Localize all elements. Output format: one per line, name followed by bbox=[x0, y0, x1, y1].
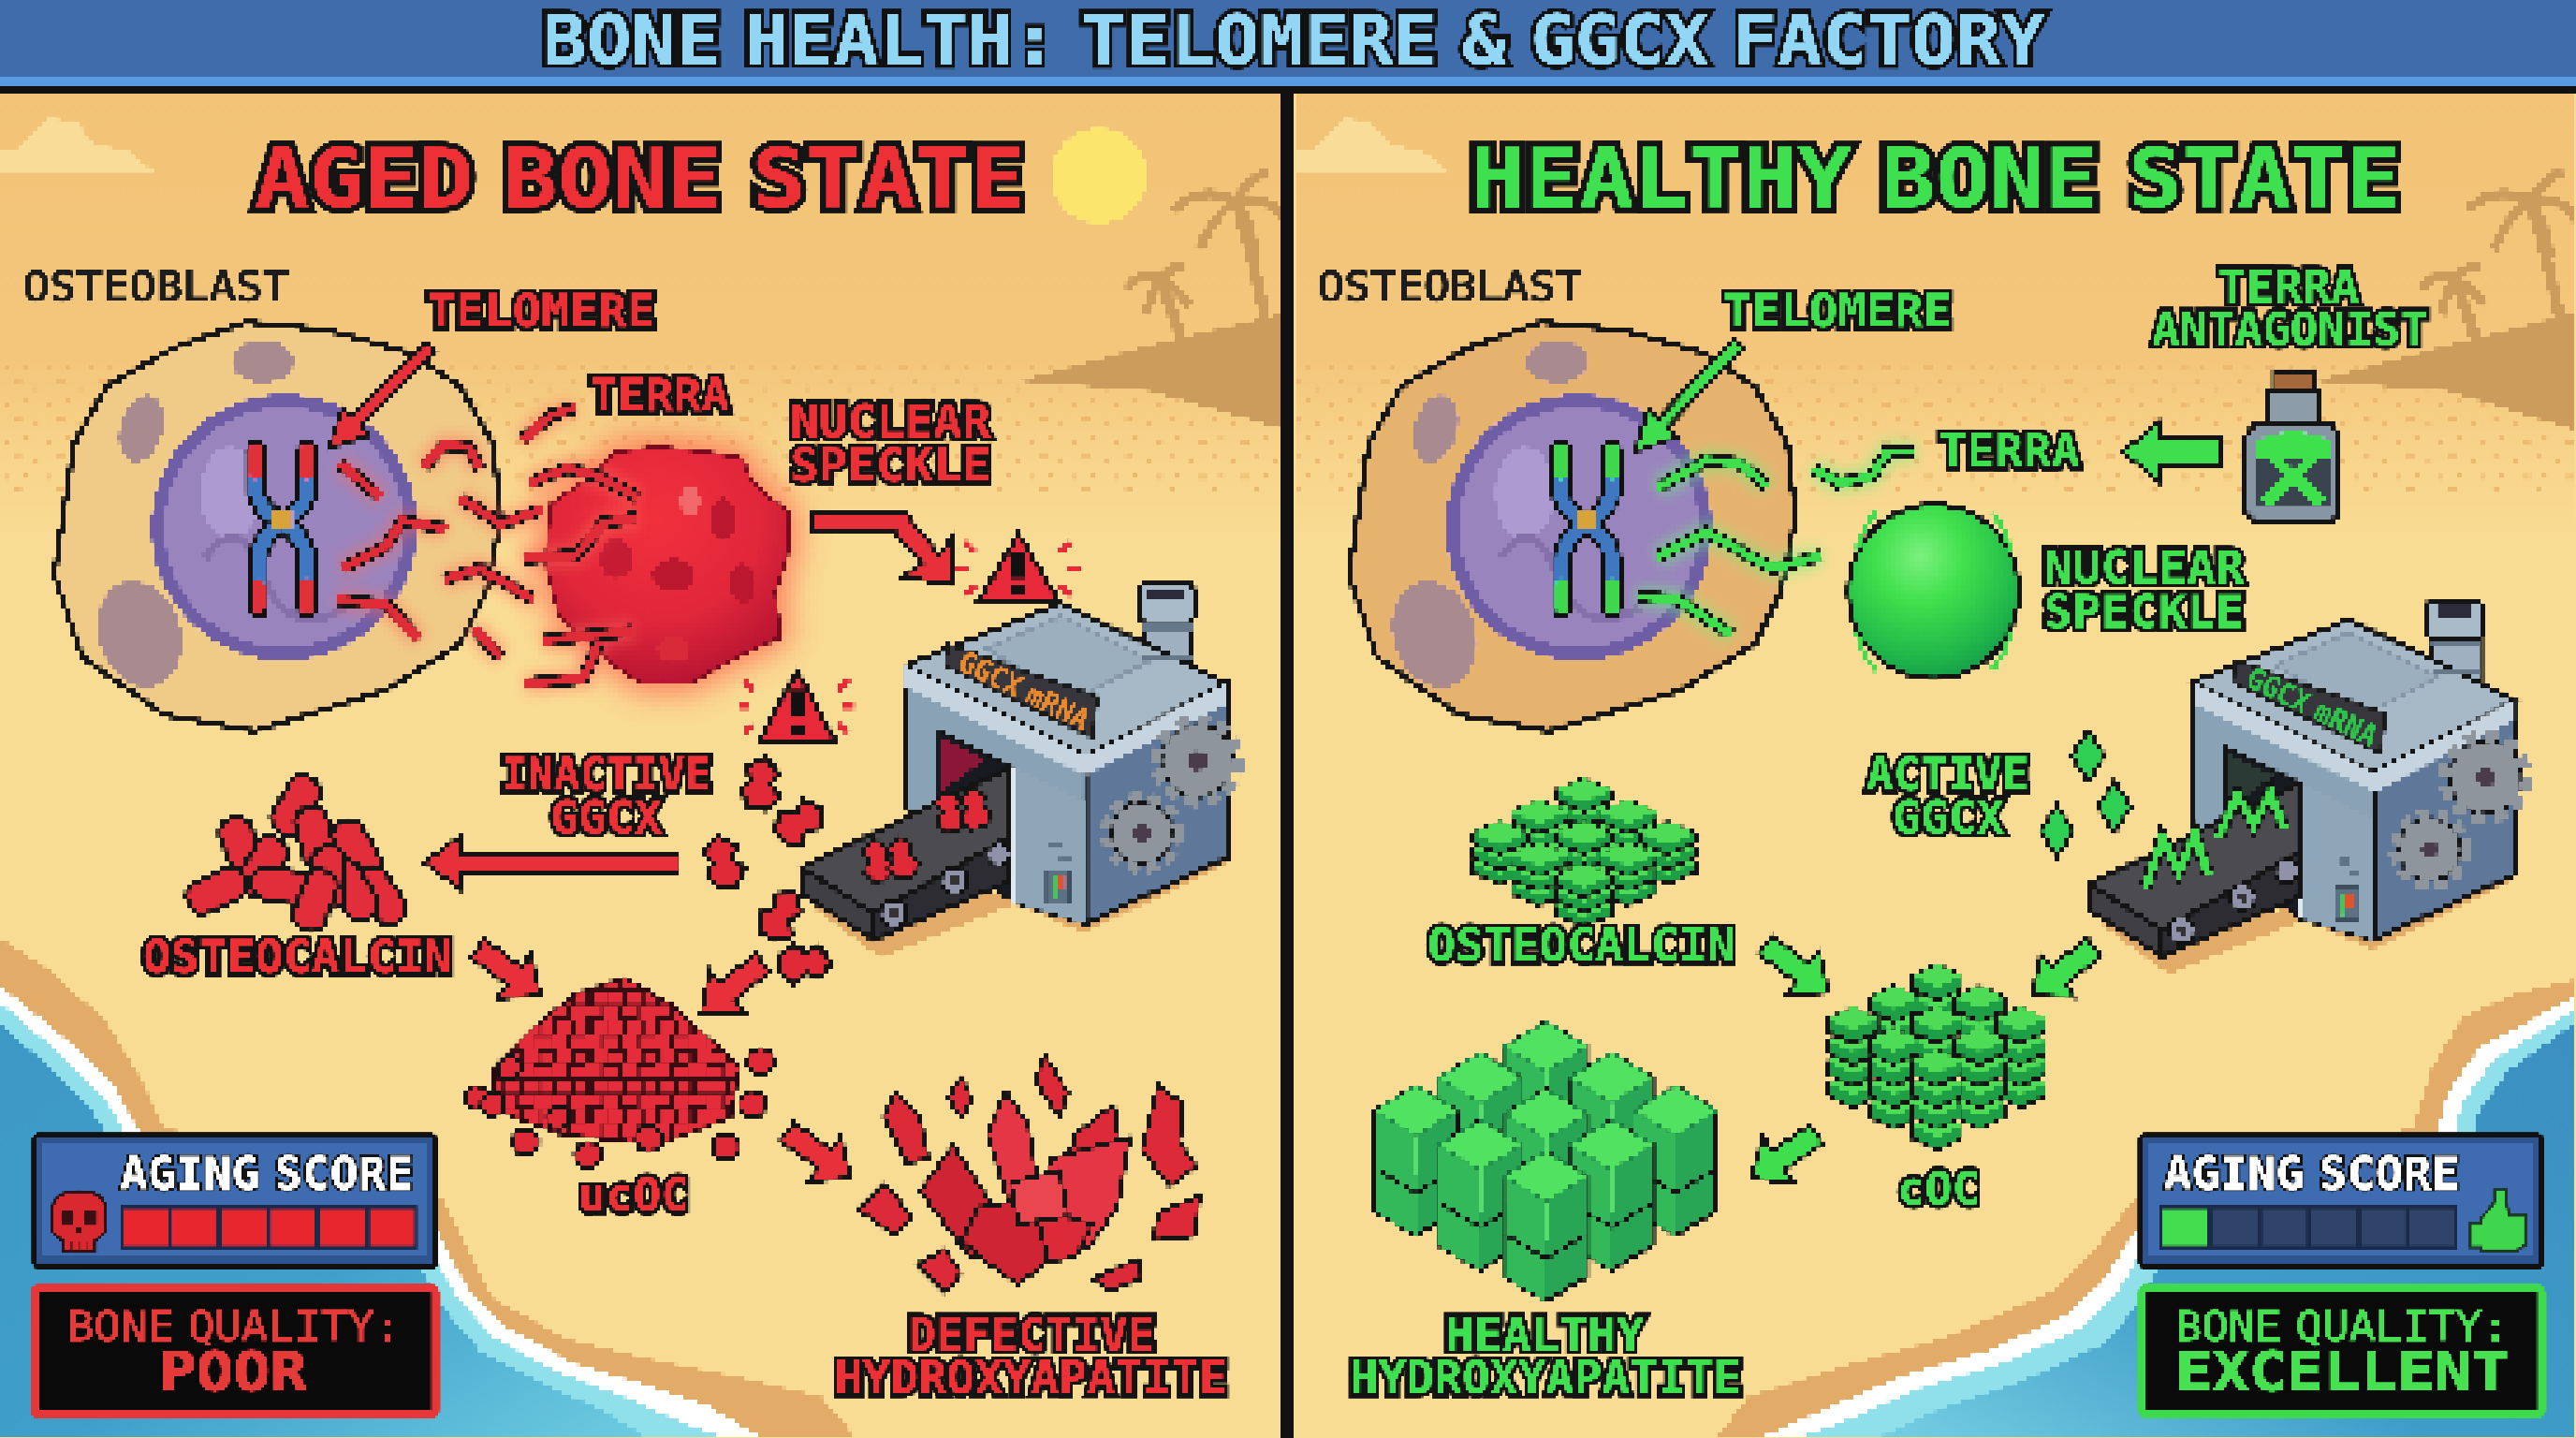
label: GGCX mRNA sign: GGCX mRNA bbox=[2241, 662, 2382, 754]
panel: aging score: AGING SCORE bbox=[120, 1147, 414, 1201]
aging score bar bbox=[2159, 1204, 2458, 1251]
icon: chromosome bbox=[1560, 450, 1612, 608]
arrow: ucOC to hydroxyapatite bbox=[770, 1109, 868, 1201]
label: healthy hydroxyapatite bbox=[1351, 1308, 1741, 1404]
ucOC pile bbox=[465, 977, 774, 1168]
warning icon: lower bbox=[738, 670, 855, 742]
label: osteocalcin: OSTEOCALCIN bbox=[143, 930, 452, 984]
panel: bone quality: EXCELLENT bbox=[2175, 1340, 2509, 1403]
heading: aged bone state: AGED BONE STATE bbox=[255, 131, 1025, 227]
label: nuclear speckle bbox=[2043, 540, 2245, 638]
defective hydroxyapatite crystals bbox=[857, 1055, 1199, 1293]
nuclear speckle blob bbox=[546, 447, 788, 683]
label: osteocalcin: OSTEOCALCIN bbox=[1427, 918, 1734, 973]
label: nuclear speckle bbox=[790, 394, 991, 492]
label: nuclear speckle: NUCLEAR bbox=[790, 394, 991, 448]
panel: aging score: AGING SCORE bbox=[2163, 1147, 2459, 1201]
TERRA RNA strands bbox=[337, 407, 637, 683]
label: inactive GGCX: INACTIVE bbox=[501, 747, 711, 801]
arrow: osteocalcin to cOC bbox=[1749, 923, 1845, 1015]
label: cOC: cOC bbox=[1897, 1161, 1980, 1215]
label: defective hydroxyapatite bbox=[835, 1308, 1227, 1404]
TERRA RNA strands bbox=[1636, 452, 1915, 634]
label: GGCX mRNA sign: GGCX mRNA bbox=[953, 645, 1094, 738]
label: inactive GGCX: GGCX bbox=[550, 790, 662, 844]
panel: bone quality: BONE QUALITY: bbox=[67, 1303, 401, 1351]
label: healthy hydroxyapatite: HYDROXYAPATITE bbox=[1351, 1350, 1741, 1404]
active GGCX diamonds bbox=[2041, 729, 2130, 858]
osteocalcin stack bbox=[1472, 779, 1695, 927]
labels layer: healthy panel bbox=[1318, 131, 2541, 1415]
label: osteoblast: OSTEOBLAST bbox=[1318, 263, 1582, 311]
label: nuclear speckle: NUCLEAR bbox=[2043, 540, 2245, 594]
panel: healthy bone state bbox=[1295, 94, 2576, 1438]
icon: skull bbox=[52, 1191, 105, 1252]
panel: aged bone state bbox=[0, 94, 1288, 1438]
panel: bone quality bbox=[2143, 1288, 2541, 1415]
falling inactive GGCX fragments bbox=[703, 753, 834, 990]
arrow: cOC to hydroxyapatite bbox=[1735, 1111, 1832, 1201]
label: telomere: TELOMERE bbox=[1723, 284, 1952, 338]
labels layer: aged panel bbox=[23, 131, 1227, 1415]
panel: aging score bbox=[35, 1136, 435, 1267]
icon: thumbs up bbox=[2471, 1190, 2525, 1251]
label: TERRA antagonist bbox=[2152, 259, 2428, 357]
osteocalcin pile bbox=[182, 770, 413, 935]
label: terra: TERRA bbox=[1939, 423, 2080, 477]
label: defective hydroxyapatite: HYDROXYAPATITE bbox=[835, 1350, 1227, 1404]
arrow: telomere pointer bbox=[1620, 330, 1754, 465]
label: TERRA antagonist: ANTAGONIST bbox=[2152, 302, 2428, 357]
cOC stack bbox=[1828, 964, 2045, 1151]
osteoblast cell bbox=[54, 322, 501, 731]
label: defective hydroxyapatite: DEFECTIVE bbox=[909, 1308, 1155, 1362]
arrow: telomere pointer bbox=[315, 333, 446, 462]
label: terra: TERRA bbox=[590, 368, 729, 422]
warning icon: upper bbox=[956, 534, 1081, 600]
arrow: osteocalcin to ucOC bbox=[461, 926, 557, 1018]
arrow: speckle to factory bbox=[813, 511, 951, 585]
label: inactive GGCX bbox=[501, 747, 711, 844]
factory: GGCX mRNA bbox=[801, 583, 1238, 958]
panel divider bbox=[1281, 94, 1294, 1438]
nuclear speckle sphere bbox=[1848, 505, 2019, 679]
label: nuclear speckle: SPECKLE bbox=[2043, 584, 2244, 638]
panel: bone quality bbox=[35, 1288, 435, 1415]
panel: aging score bbox=[2141, 1136, 2541, 1267]
header bar bbox=[0, 0, 2576, 94]
label: TERRA antagonist: TERRA bbox=[2217, 259, 2359, 314]
panel: bone quality: BONE QUALITY: bbox=[2175, 1303, 2509, 1351]
label: active GGCX: GGCX bbox=[1893, 790, 2004, 844]
label: active GGCX: ACTIVE bbox=[1866, 747, 2029, 801]
arrow: GGCX to cOC bbox=[2015, 925, 2112, 1018]
beach background: healthy panel bbox=[1295, 94, 2576, 1438]
arrow: antagonist to TERRA bbox=[2123, 422, 2221, 481]
arrow: GGCX to ucOC bbox=[684, 941, 781, 1034]
title: BONE HEALTH: TELOMERE & GGCX FACTORY bbox=[542, 1, 2046, 81]
label: telomere: TELOMERE bbox=[427, 284, 655, 338]
label: osteoblast: OSTEOBLAST bbox=[23, 263, 289, 311]
label: ucOC: ucOC bbox=[578, 1168, 688, 1223]
arrow: GGCX to osteocalcin bbox=[424, 836, 679, 889]
bottle: TERRA antagonist bbox=[2246, 372, 2339, 521]
healthy hydroxyapatite crystal cluster bbox=[1375, 1022, 1717, 1301]
aging score bar bbox=[120, 1204, 417, 1251]
heading: healthy bone state: HEALTHY BONE STATE bbox=[1471, 131, 2400, 227]
panel: bone quality: POOR bbox=[159, 1340, 307, 1403]
label: active GGCX bbox=[1866, 747, 2029, 844]
beach background: aged panel bbox=[0, 94, 1288, 1438]
osteoblast cell bbox=[1349, 322, 1795, 731]
icon: chromosome bbox=[256, 450, 307, 608]
factory: GGCX mRNA bbox=[2089, 600, 2526, 975]
label: nuclear speckle: SPECKLE bbox=[790, 438, 990, 492]
label: healthy hydroxyapatite: HEALTHY bbox=[1445, 1308, 1645, 1362]
